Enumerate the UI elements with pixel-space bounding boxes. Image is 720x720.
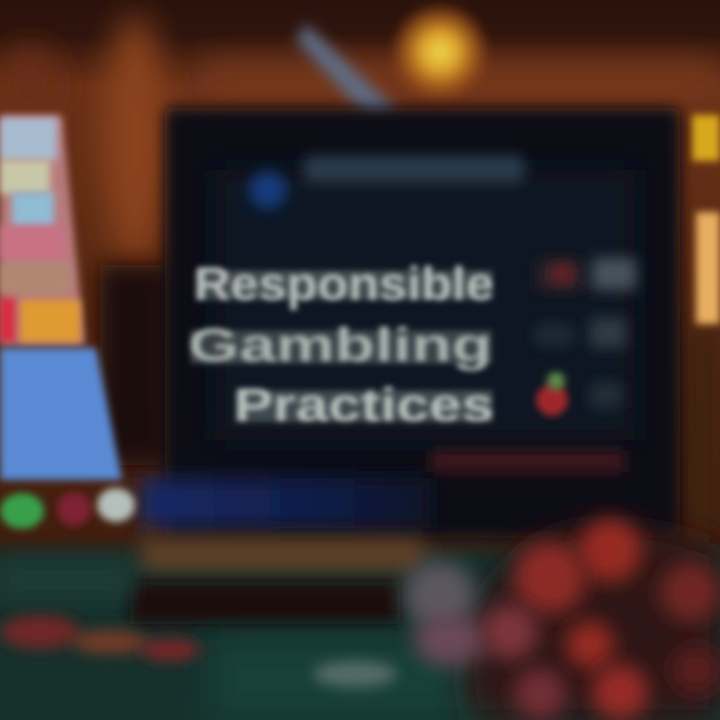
left colorful display (0, 115, 135, 529)
chips left (0, 615, 200, 661)
screen header logo (249, 156, 524, 209)
screen heading: Practices (234, 378, 494, 431)
right side lights (692, 115, 720, 324)
left stand base shadow (100, 265, 170, 465)
screen bottom band (140, 478, 430, 528)
chips right pile (404, 518, 720, 720)
monitor screen (140, 108, 680, 538)
ceiling lamp (388, 0, 492, 104)
table (0, 535, 720, 720)
screen heading: Responsible (194, 257, 494, 310)
screen heading: Gambling (188, 318, 492, 371)
hanging bracket (296, 24, 396, 122)
screen side indicators (535, 258, 636, 416)
screen heading (188, 257, 494, 431)
